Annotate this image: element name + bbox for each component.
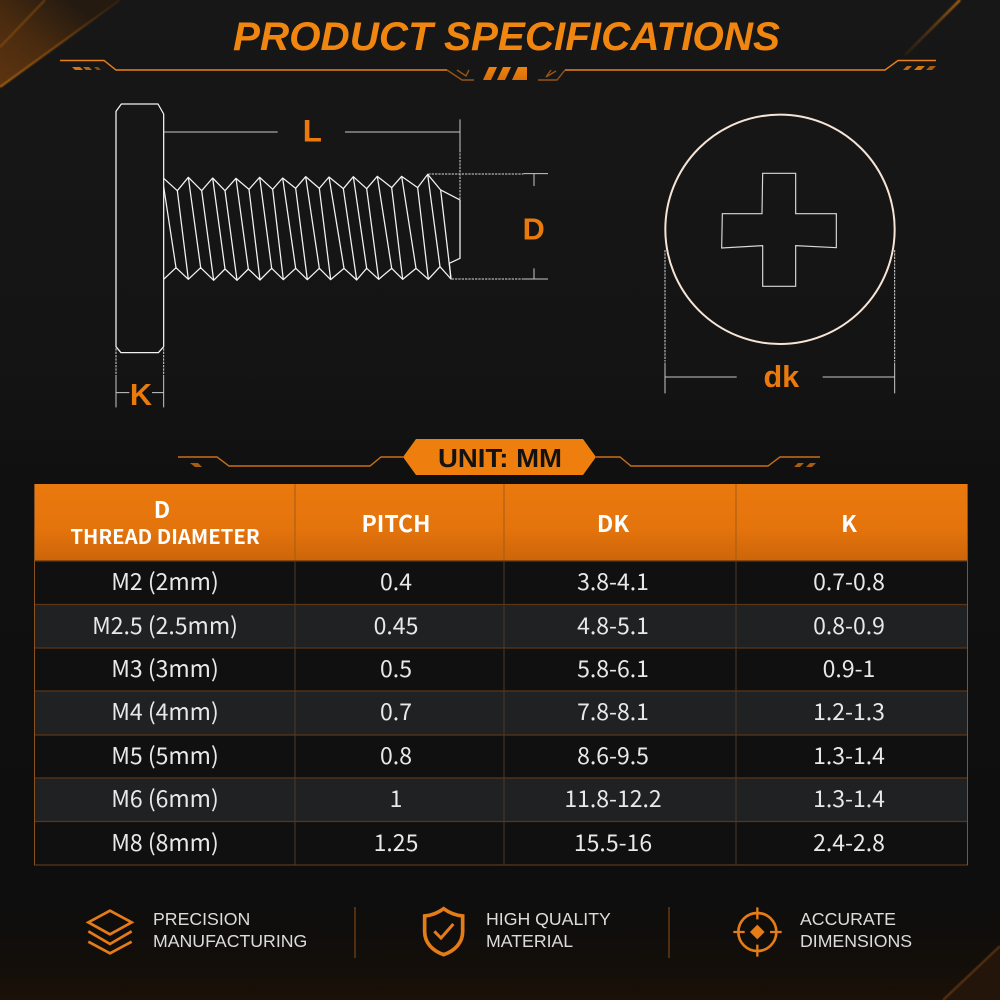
dimension L	[164, 114, 460, 200]
row M8: 1.25	[374, 824, 418, 858]
unit badge	[178, 439, 820, 475]
row M3: M3 (3mm)	[111, 650, 219, 684]
row M3: 0.9-1	[823, 650, 875, 684]
row M2.5: 0.8-0.9	[813, 607, 885, 641]
row M5: 0.8	[380, 737, 412, 771]
row M4: 0.7	[380, 693, 412, 727]
row M2.5: 0.45	[374, 607, 418, 641]
dimension K	[116, 348, 164, 412]
title divider ornament	[60, 60, 936, 80]
dimension dk	[665, 250, 895, 394]
row M2.5	[92, 607, 885, 641]
row M4	[111, 693, 885, 727]
dimension dk: dk	[763, 360, 800, 394]
icon: shield	[425, 909, 463, 955]
cross recess	[722, 173, 836, 286]
row M2.5: M2.5 (2.5mm)	[92, 607, 238, 641]
dimension L: L	[303, 114, 322, 149]
divider	[354, 907, 356, 958]
table header: PITCH	[361, 505, 431, 539]
feature: accurate dimensions: ACCURATE	[800, 909, 896, 929]
row M6	[111, 780, 885, 814]
table header	[34, 484, 968, 561]
row M5: 8.6-9.5	[577, 737, 649, 771]
table header: THREAD DIAMETER	[70, 520, 260, 550]
divider	[668, 907, 670, 958]
row M2: M2 (2mm)	[111, 563, 219, 597]
dimension K: K	[130, 378, 152, 412]
thread profile	[164, 174, 460, 280]
row M8: 2.4-2.8	[813, 824, 885, 858]
table header: K	[841, 505, 857, 539]
screw head	[116, 104, 164, 353]
specification table	[34, 484, 968, 865]
row M2: 0.7-0.8	[813, 563, 885, 597]
row M8: M8 (8mm)	[111, 824, 219, 858]
icon: target	[733, 907, 782, 957]
feature: high quality material	[425, 909, 611, 955]
feature: precision manufacturing: PRECISION	[153, 909, 250, 929]
row M4: M4 (4mm)	[111, 693, 219, 727]
table header: D	[154, 491, 170, 525]
row M6: 1.3-1.4	[813, 780, 885, 814]
head circle	[665, 115, 895, 344]
row M3	[111, 650, 875, 684]
row M2	[111, 563, 885, 597]
row M2: 3.8-4.1	[577, 563, 649, 597]
feature: accurate dimensions: DIMENSIONS	[800, 931, 912, 951]
screw head top view diagram	[665, 115, 895, 394]
feature: high quality material: MATERIAL	[486, 931, 573, 951]
row M6: 11.8-12.2	[564, 780, 662, 814]
row M6: M6 (6mm)	[111, 780, 219, 814]
dimension D	[428, 174, 548, 279]
row M8	[111, 824, 885, 858]
table header: DK	[597, 505, 629, 539]
row M6: 1	[390, 780, 402, 814]
row M5: 1.3-1.4	[813, 737, 885, 771]
row M3: 5.8-6.1	[577, 650, 649, 684]
row M5	[111, 737, 885, 771]
dimension D: D	[523, 213, 545, 247]
table rows background	[34, 484, 968, 865]
feature: high quality material: HIGH QUALITY	[486, 909, 611, 929]
feature: precision manufacturing: MANUFACTURING	[153, 931, 307, 951]
row M4: 7.8-8.1	[577, 693, 649, 727]
row M8: 15.5-16	[574, 824, 652, 858]
feature: accurate dimensions	[733, 907, 912, 957]
unit badge: UNIT: MM	[438, 443, 562, 473]
row M3: 0.5	[380, 650, 412, 684]
title: PRODUCT SPECIFICATIONS	[233, 15, 780, 59]
row M5: M5 (5mm)	[111, 737, 219, 771]
icon: layers	[88, 911, 132, 953]
row M2.5: 4.8-5.1	[577, 607, 649, 641]
feature: precision manufacturing	[88, 909, 307, 953]
row M2: 0.4	[380, 563, 412, 597]
screw side view diagram	[116, 104, 548, 412]
row M4: 1.2-1.3	[813, 693, 885, 727]
